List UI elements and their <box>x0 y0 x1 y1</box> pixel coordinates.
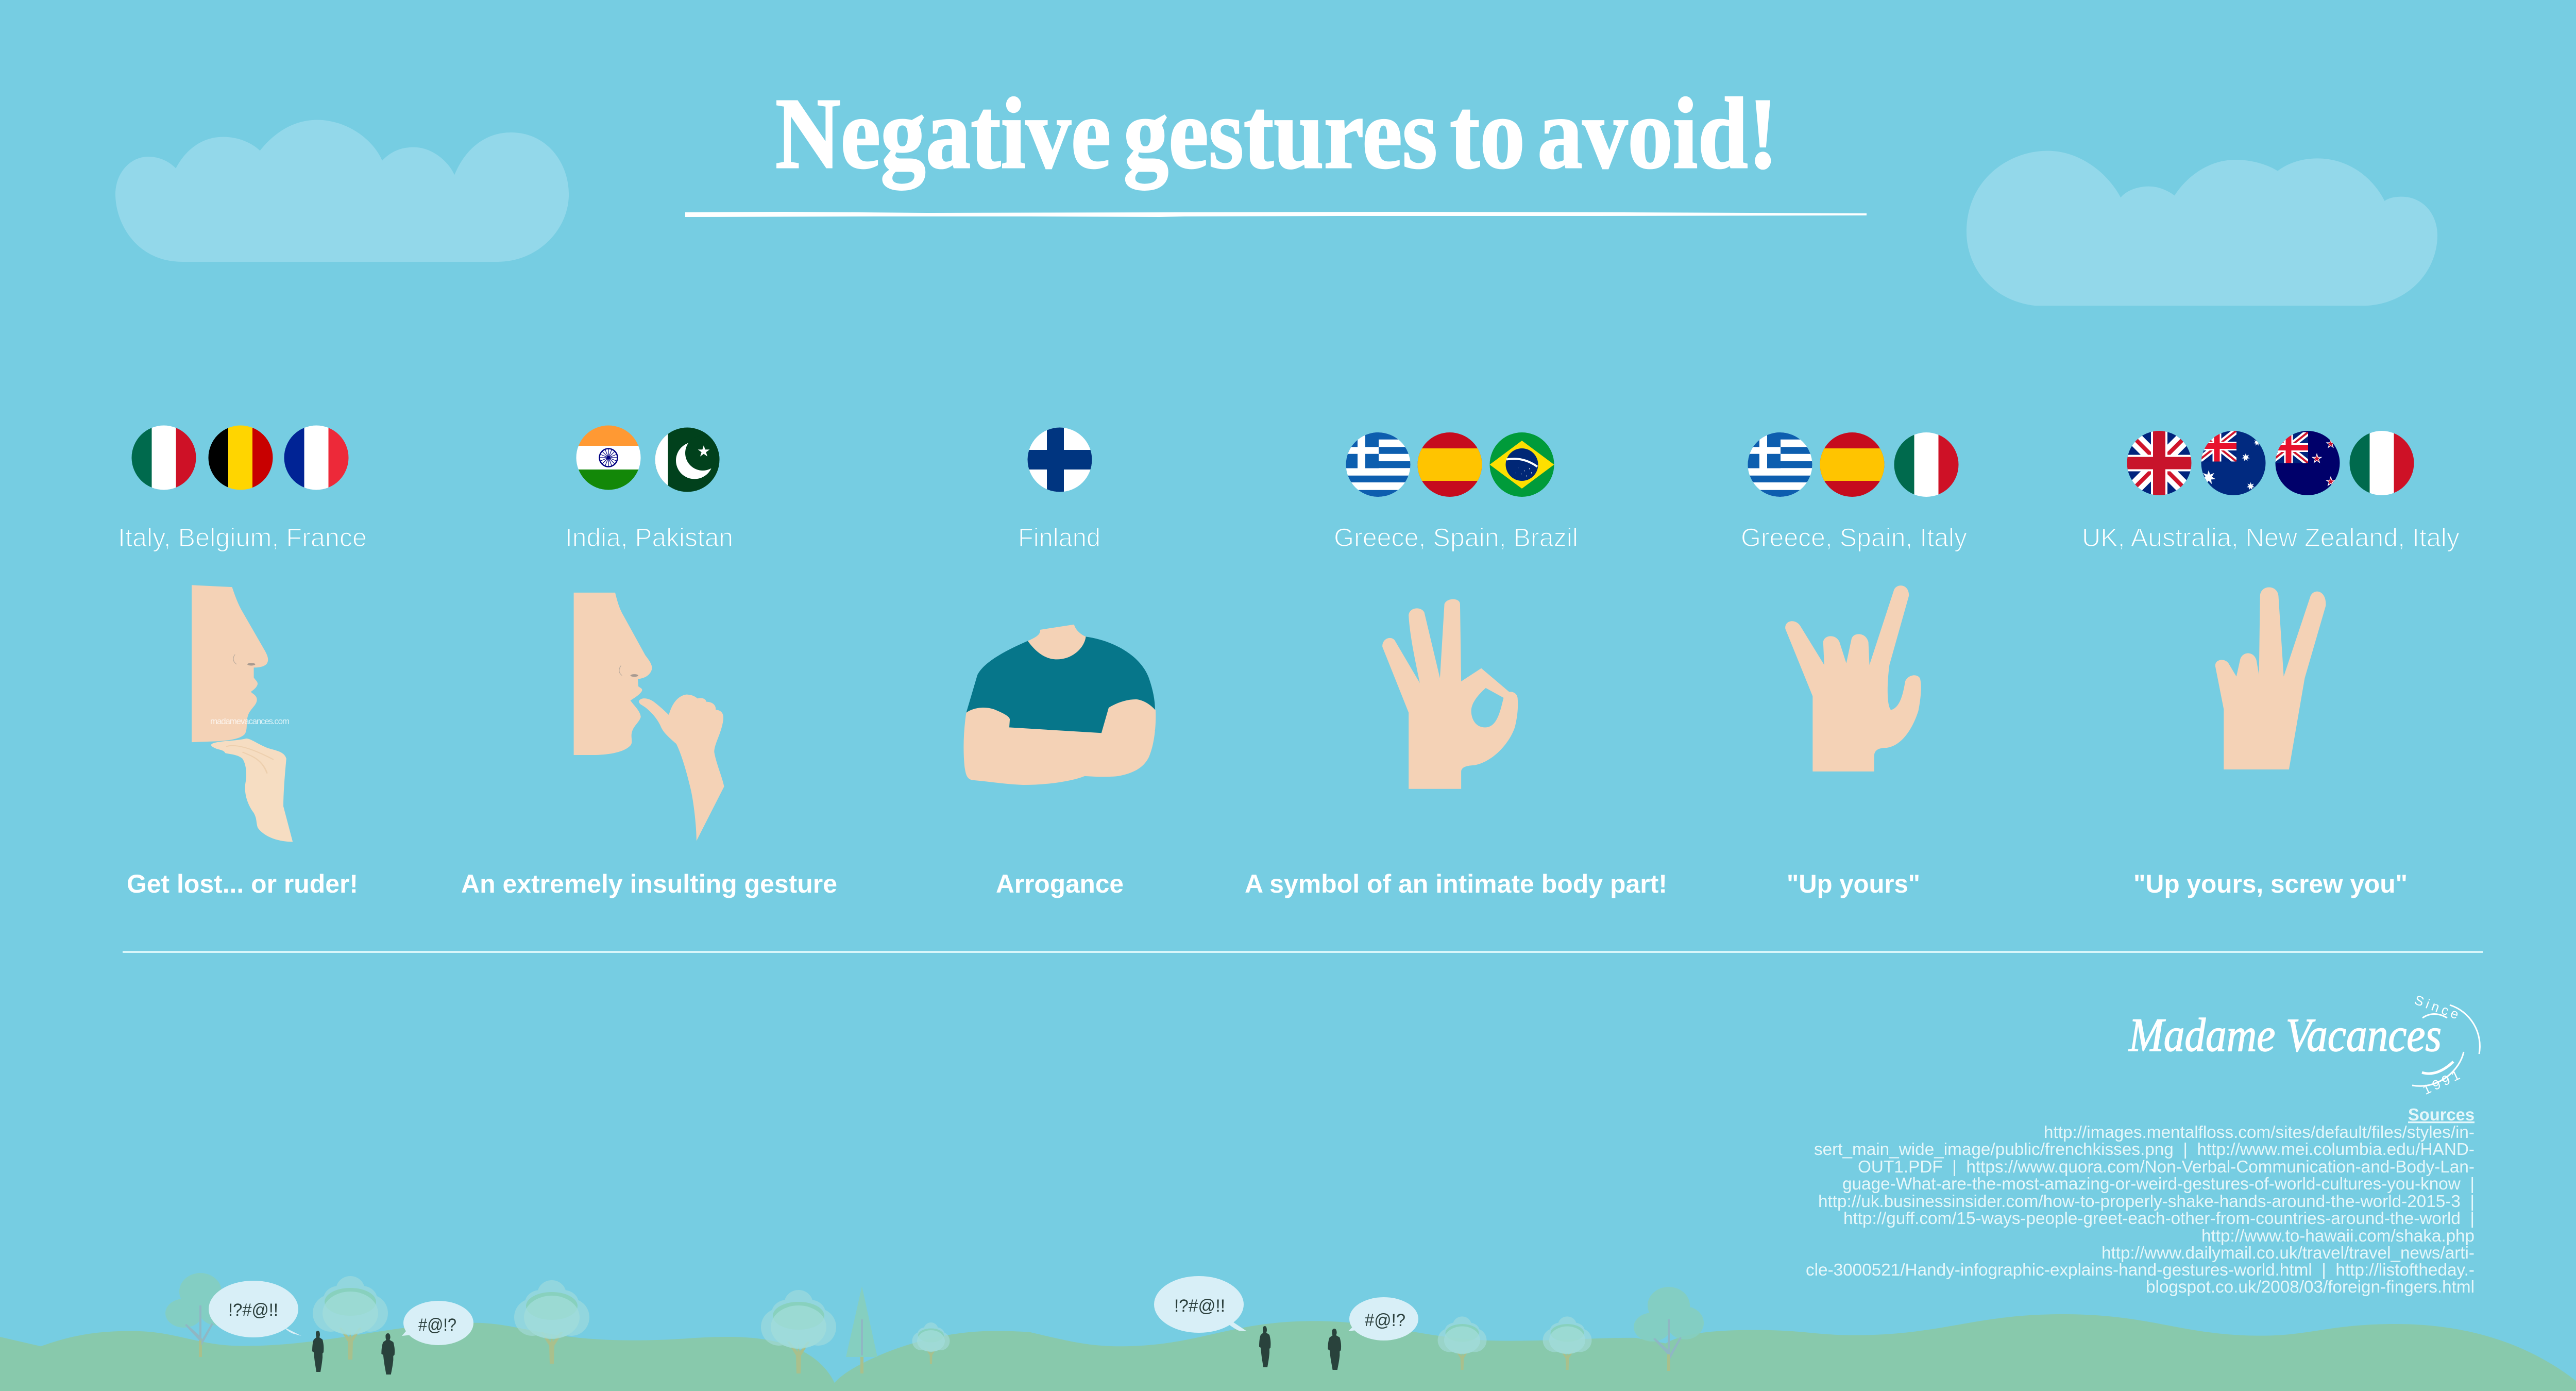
panel: UK, Australia, New Zealand, Italy <box>2082 431 2460 898</box>
speech bubble 4 <box>1348 1297 1418 1340</box>
person 2 <box>381 1333 395 1375</box>
logo wordmark: Madame Vacances <box>2128 1009 2442 1061</box>
cloud right <box>1967 151 2437 306</box>
speech bubble 3: !?#@!! <box>1174 1296 1225 1316</box>
sources list: http://guff.com/15-ways-people-greet-each-other-from-countries-around-the-world | <box>1843 1209 2475 1228</box>
sources list: http://www.dailymail.co.uk/travel/travel_news/arti- <box>2102 1243 2475 1262</box>
panel: Greece, Spain, Italy <box>1741 432 1967 898</box>
country label: Greece, Spain, Brazil <box>1334 523 1578 552</box>
flag: Greece <box>1748 432 1812 497</box>
stamp swoosh <box>2422 1062 2453 1074</box>
gesture: thumb flick from teeth <box>574 593 724 841</box>
flag: Australia <box>2197 431 2266 496</box>
hills left <box>0 1323 1030 1391</box>
caption: "Up yours, screw you" <box>2133 869 2408 898</box>
sources list: sert_main_wide_image/public/frenchkisses.png | http://www.mei.columbia.edu/HAND- <box>1814 1139 2475 1159</box>
speech bubble 1 <box>209 1281 301 1337</box>
sources list: http://images.mentalfloss.com/sites/default/files/styles/in- <box>2044 1122 2475 1142</box>
panel: India, Pakistan <box>461 425 837 898</box>
caption: Get lost... or ruder! <box>127 869 358 898</box>
tree: round 3 <box>761 1290 836 1373</box>
speech bubble 4: #@!? <box>1365 1311 1405 1330</box>
tree: round 2 <box>514 1280 589 1364</box>
watermark: madamevacances.com <box>210 716 290 726</box>
country label: Greece, Spain, Italy <box>1741 523 1967 552</box>
stamp arcs <box>2412 1005 2480 1086</box>
country label: Italy, Belgium, France <box>118 523 367 552</box>
caption: A symbol of an intimate body part! <box>1245 869 1667 898</box>
flag: Finland <box>1027 427 1092 492</box>
tree: tall left <box>165 1273 235 1357</box>
country label: India, Pakistan <box>565 523 733 552</box>
gesture: chin flick <box>192 585 293 842</box>
sources list: http://www.to-hawaii.com/shaka.php <box>2201 1226 2475 1245</box>
tree: fir <box>846 1286 877 1373</box>
speech bubble 3 <box>1154 1276 1247 1333</box>
sources list: OUT1.PDF | https://www.quora.com/Non-Verbal-Communication-and-Body-Lan- <box>1858 1157 2475 1176</box>
gesture: horns <box>1785 585 1921 772</box>
sources <box>1806 1105 2475 1296</box>
tree: small 1 <box>912 1322 950 1364</box>
flag: UK <box>2127 431 2192 496</box>
title: Negative gestures to avoid! <box>775 77 1778 190</box>
gesture: V sign <box>2215 588 2326 769</box>
country label: Finland <box>1018 523 1100 552</box>
sources list: blogspot.co.uk/2008/03/foreign-fingers.html <box>2146 1277 2475 1296</box>
flag: Greece <box>1346 432 1411 497</box>
cloud left <box>115 120 569 262</box>
title underline <box>685 212 1867 217</box>
flag: New Zealand <box>2269 431 2340 496</box>
tree: small 3 <box>1543 1316 1591 1370</box>
panel: Italy, Belgium, France <box>118 425 367 898</box>
landscape <box>0 1273 2576 1391</box>
tree: tall right <box>1634 1287 1704 1371</box>
flag: Belgium <box>208 425 273 490</box>
flag: Brazil <box>1489 432 1554 497</box>
flag: Pakistan <box>655 427 720 492</box>
speech bubble 2: #@!? <box>418 1315 456 1335</box>
sources list: cle-3000521/Handy-infographic-explains-hand-gestures-world.html | http://listoftheday.- <box>1806 1260 2475 1279</box>
flag: Spain <box>1820 432 1885 497</box>
caption: "Up yours" <box>1787 869 1920 898</box>
stamp: since: Since <box>2413 992 2464 1023</box>
person 3 <box>1259 1326 1270 1367</box>
hills right <box>1030 1314 2576 1391</box>
logo: Madame Vacances <box>2128 992 2480 1098</box>
flag: Italy <box>131 425 197 490</box>
flag: Spain <box>1417 432 1482 497</box>
tree: round 1 <box>313 1276 388 1360</box>
speech bubble 2 <box>402 1301 473 1345</box>
person 1 <box>312 1331 324 1372</box>
sources list: guage-What-are-the-most-amazing-or-weird-gestures-of-world-cultures-you-know | <box>1842 1174 2475 1193</box>
gesture: OK sign <box>1382 599 1518 789</box>
sources list <box>1806 1122 2475 1296</box>
person 4 <box>1328 1329 1341 1370</box>
panel: Finland <box>963 427 1156 898</box>
speech bubble 1: !?#@!! <box>228 1300 278 1320</box>
flag: France <box>284 425 349 490</box>
flag: India <box>576 425 641 490</box>
caption: An extremely insulting gesture <box>461 869 837 898</box>
tree: small 2 <box>1438 1316 1486 1370</box>
stamp: year: 1991 <box>2420 1066 2465 1098</box>
panel: Greece, Spain, Brazil <box>1245 432 1667 898</box>
flag: Italy <box>1894 432 1959 497</box>
sources list: http://uk.businessinsider.com/how-to-properly-shake-hands-around-the-world-2015-3 | <box>1818 1192 2475 1211</box>
flag: Italy <box>2349 431 2414 496</box>
country label: UK, Australia, New Zealand, Italy <box>2082 523 2460 552</box>
caption: Arrogance <box>996 869 1124 898</box>
sources heading: Sources <box>2408 1105 2475 1124</box>
gesture: folded arms <box>963 625 1156 785</box>
